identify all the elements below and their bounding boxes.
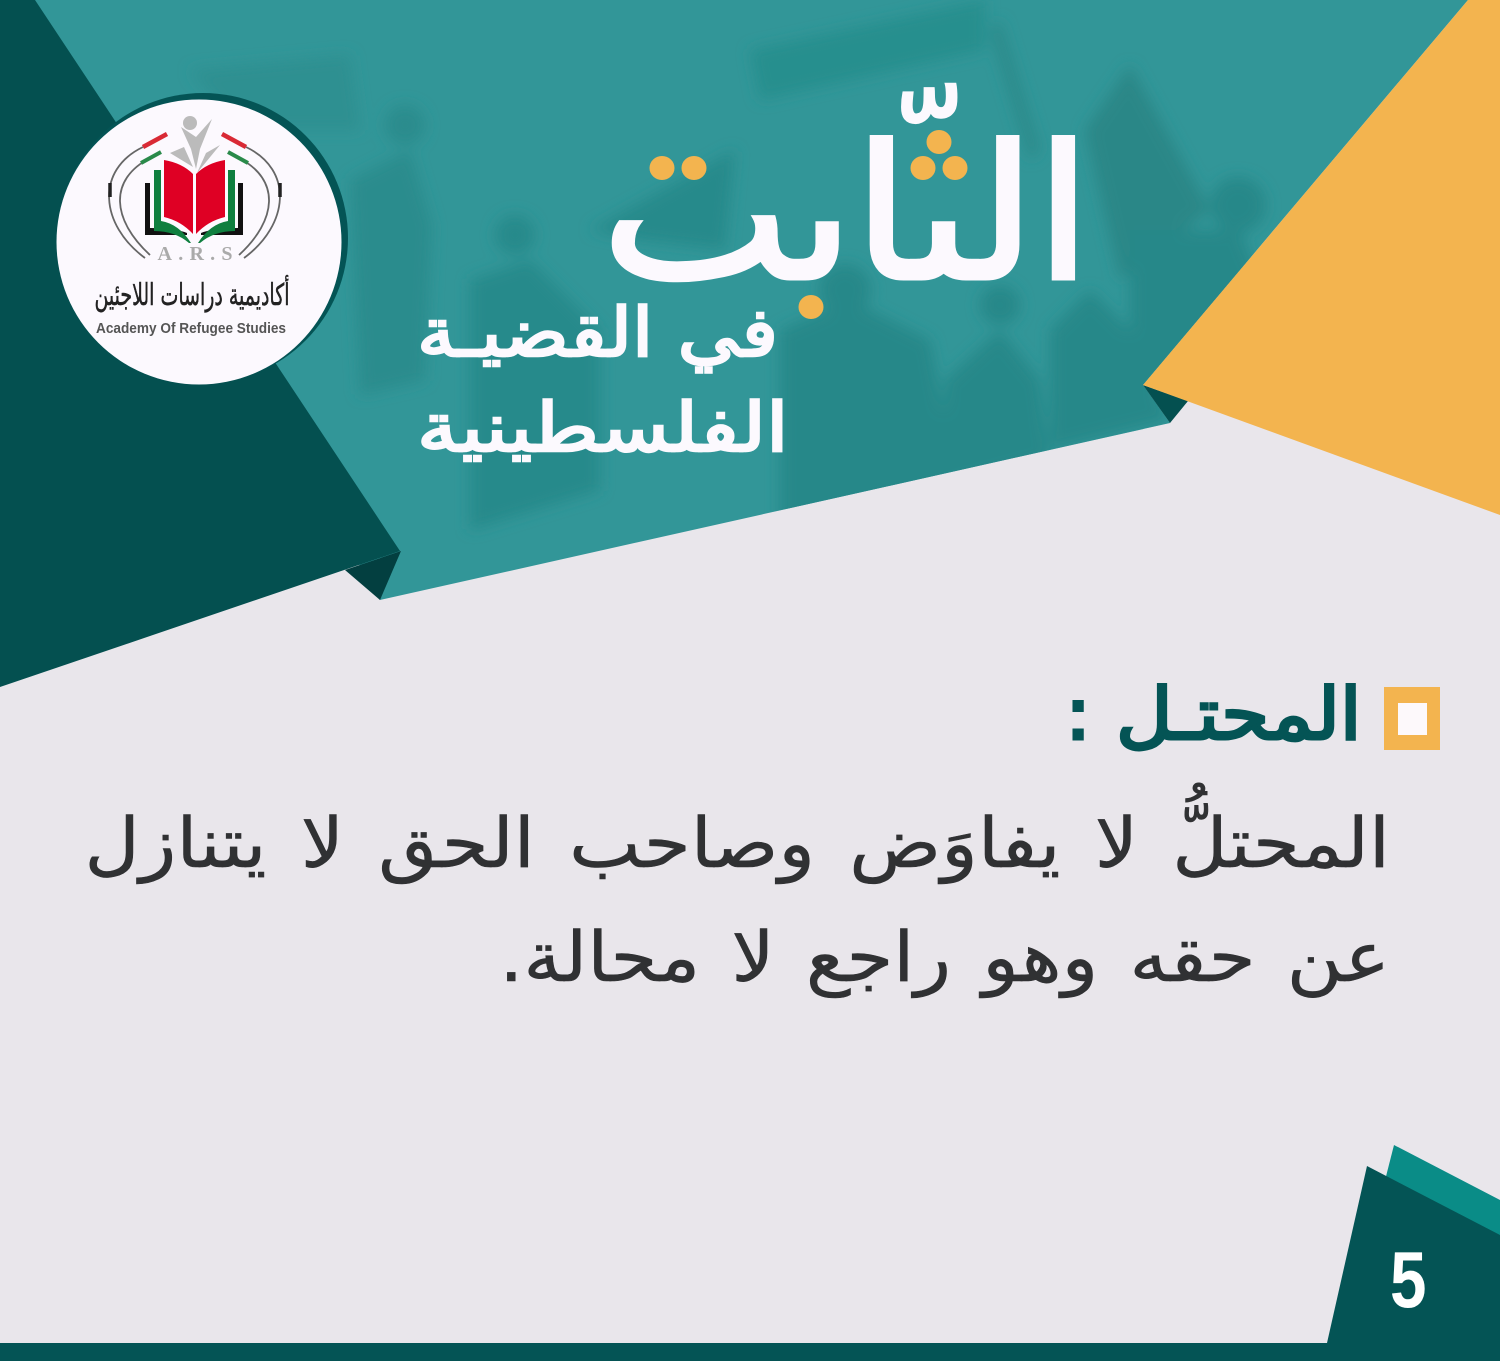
subtitle line 2: الفلسطينية [417, 389, 789, 468]
subtitle line 1: في القضيـة [417, 294, 778, 373]
logo [56, 93, 348, 384]
icon: book emblem [109, 116, 280, 258]
footer bar [0, 1343, 1500, 1361]
body line 1: المحتلُّ لا يفاوَض وصاحب الحق لا يتنازل [84, 802, 1390, 883]
panel: teal header [30, 0, 1468, 600]
left fold [345, 551, 401, 600]
photo silhouettes of crowd with flags [355, 4, 1264, 526]
page number: 5 [1390, 1235, 1426, 1324]
logo english name: Academy Of Refugee Studies [96, 321, 286, 337]
right fold [1143, 385, 1188, 423]
corner teal back [1380, 1145, 1500, 1240]
heading bullet [1384, 687, 1440, 750]
body line 2: عن حقه وهو راجع لا محالة. [499, 916, 1390, 997]
logo letters: A.R.S [158, 243, 232, 265]
title: الثّابت [602, 106, 1091, 322]
heading: المحتـل : [1065, 672, 1362, 756]
corner dark page tab [1327, 1166, 1500, 1343]
text: ﹼ [904, 75, 955, 244]
panel: dark green left triangle [0, 0, 400, 687]
panel: yellow triangle [1143, 0, 1500, 515]
